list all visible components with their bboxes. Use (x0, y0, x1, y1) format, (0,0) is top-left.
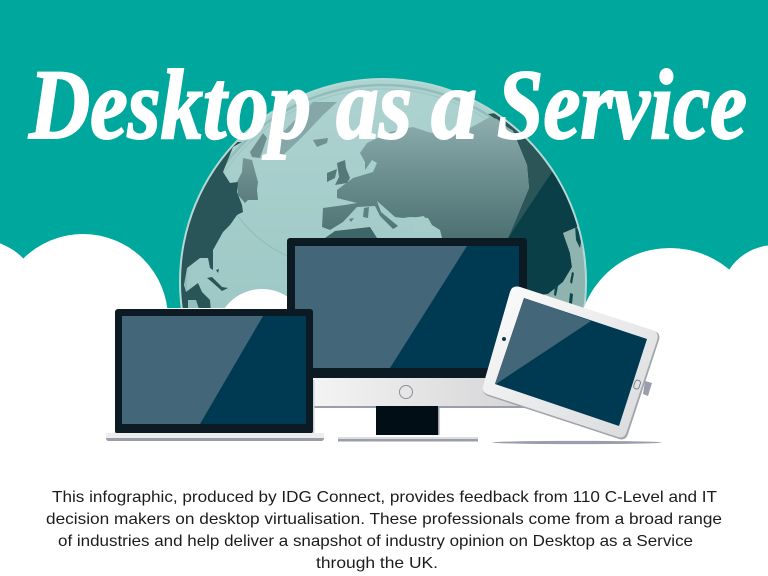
laptop base (106, 433, 324, 441)
side button (643, 381, 652, 396)
intro text: decision makers on desktop virtualisation. These professionals come from a broad range (46, 511, 722, 528)
tablet (483, 287, 662, 444)
monitor (287, 238, 528, 442)
clouds (0, 234, 768, 576)
laptop (106, 309, 324, 441)
iceland (313, 138, 328, 147)
kamchatka and japan (554, 225, 582, 304)
cuba (207, 277, 228, 291)
upper right dark limb (488, 113, 582, 250)
intro text: of industries and help deliver a snapshot of industry opinion on Desktop as a Service (58, 533, 693, 550)
intro text: This infographic, produced by IDG Connect, provides feedback from 110 C-Level and IT (52, 489, 717, 506)
title: Desktop (28, 49, 311, 160)
intro text (46, 489, 722, 572)
north africa (325, 227, 377, 238)
north america (181, 142, 243, 308)
britain (335, 160, 350, 185)
power button (400, 386, 412, 398)
tablet shadow (492, 441, 662, 444)
monitor stand (376, 406, 438, 435)
camera (502, 337, 506, 341)
eurasia (322, 117, 529, 238)
intro text: through the UK. (316, 555, 438, 572)
laptop screen (122, 316, 306, 424)
monitor chin (313, 378, 528, 406)
monitor base (338, 437, 478, 440)
monitor screen (295, 246, 519, 368)
globe (179, 78, 587, 308)
title: as (336, 49, 412, 160)
arctic islands (280, 102, 337, 154)
tablet screen (495, 298, 647, 426)
home button (633, 379, 641, 390)
title: a (431, 49, 477, 160)
faint meridian (237, 215, 287, 256)
pale yucatan gap (188, 300, 199, 308)
east coast sea (547, 227, 585, 308)
asia and sheen (508, 172, 578, 294)
ireland (327, 169, 337, 182)
hispaniola (216, 269, 219, 273)
mediterranean islands (349, 207, 369, 222)
greenland (237, 158, 258, 203)
title (28, 49, 747, 160)
